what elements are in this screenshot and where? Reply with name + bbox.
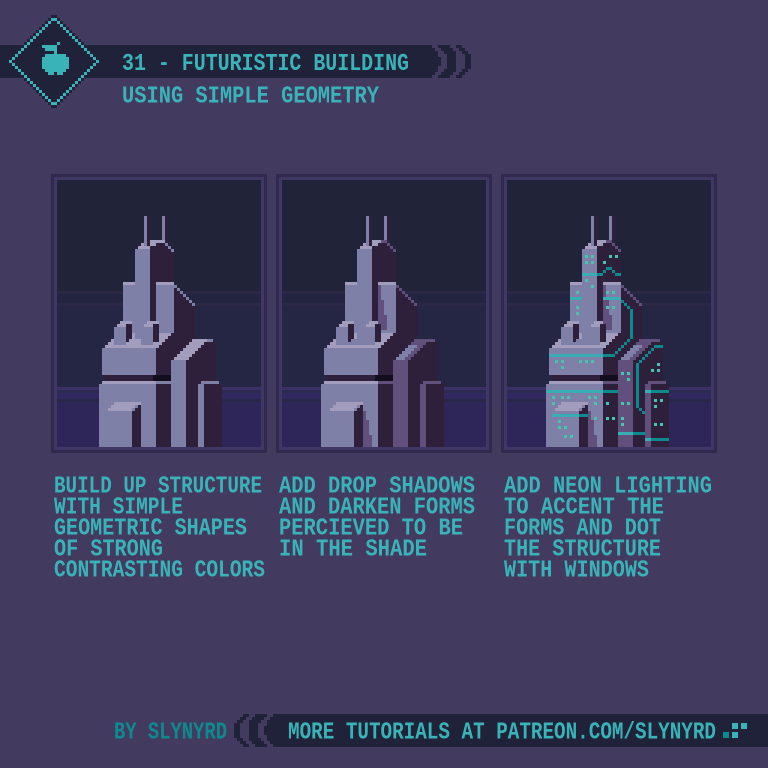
windows xyxy=(552,255,663,438)
text block: step 1: WITH SIMPLE xyxy=(54,494,183,521)
text block: step 2: AND DARKEN FORMS xyxy=(279,494,475,521)
title: 31 - FUTURISTIC BUILDING xyxy=(122,50,409,78)
neon lines bright xyxy=(546,273,651,441)
text block: step 2: PERCIEVED TO BE xyxy=(279,515,463,542)
subtitle: USING SIMPLE GEOMETRY xyxy=(122,83,380,110)
text block: step 2: IN THE SHADE xyxy=(279,536,427,563)
building: neon lit xyxy=(546,216,669,447)
text block: step 2: ADD DROP SHADOWS xyxy=(279,473,475,500)
text block: step 3: WITH WINDOWS xyxy=(504,557,649,584)
icon: footer pixel squares xyxy=(723,723,747,738)
text block: step 1 xyxy=(54,473,265,584)
header ribbon xyxy=(0,45,471,78)
text block: step 3 xyxy=(504,473,712,584)
neon lines dark xyxy=(579,267,669,441)
text block: step 3: ADD NEON LIGHTING xyxy=(504,473,712,500)
icon: diamond badge with apple xyxy=(9,15,99,108)
text block: step 1: GEOMETRIC SHAPES xyxy=(54,515,247,542)
panel 1: basic shapes xyxy=(51,174,267,453)
text block: step 1: OF STRONG xyxy=(54,536,163,563)
footer link text: MORE TUTORIALS AT PATREON.COM/SLYNYRD xyxy=(288,719,716,746)
panel 3: neon and windows xyxy=(501,174,717,453)
text block: step 3: THE STRUCTURE xyxy=(504,536,661,563)
text block: step 3: TO ACCENT THE xyxy=(504,494,664,521)
text block: step 2 xyxy=(279,473,475,563)
credit: BY SLYNYRD xyxy=(114,719,227,746)
text block: step 1: CONTRASTING COLORS xyxy=(54,557,265,584)
text block: step 1: BUILD UP STRUCTURE xyxy=(54,473,262,500)
footer ribbon xyxy=(234,714,768,747)
building: with shadows xyxy=(321,216,444,447)
panel 2: drop shadows xyxy=(276,174,492,453)
building: simple geometric forms xyxy=(99,216,222,447)
text block: step 3: FORMS AND DOT xyxy=(504,515,661,542)
